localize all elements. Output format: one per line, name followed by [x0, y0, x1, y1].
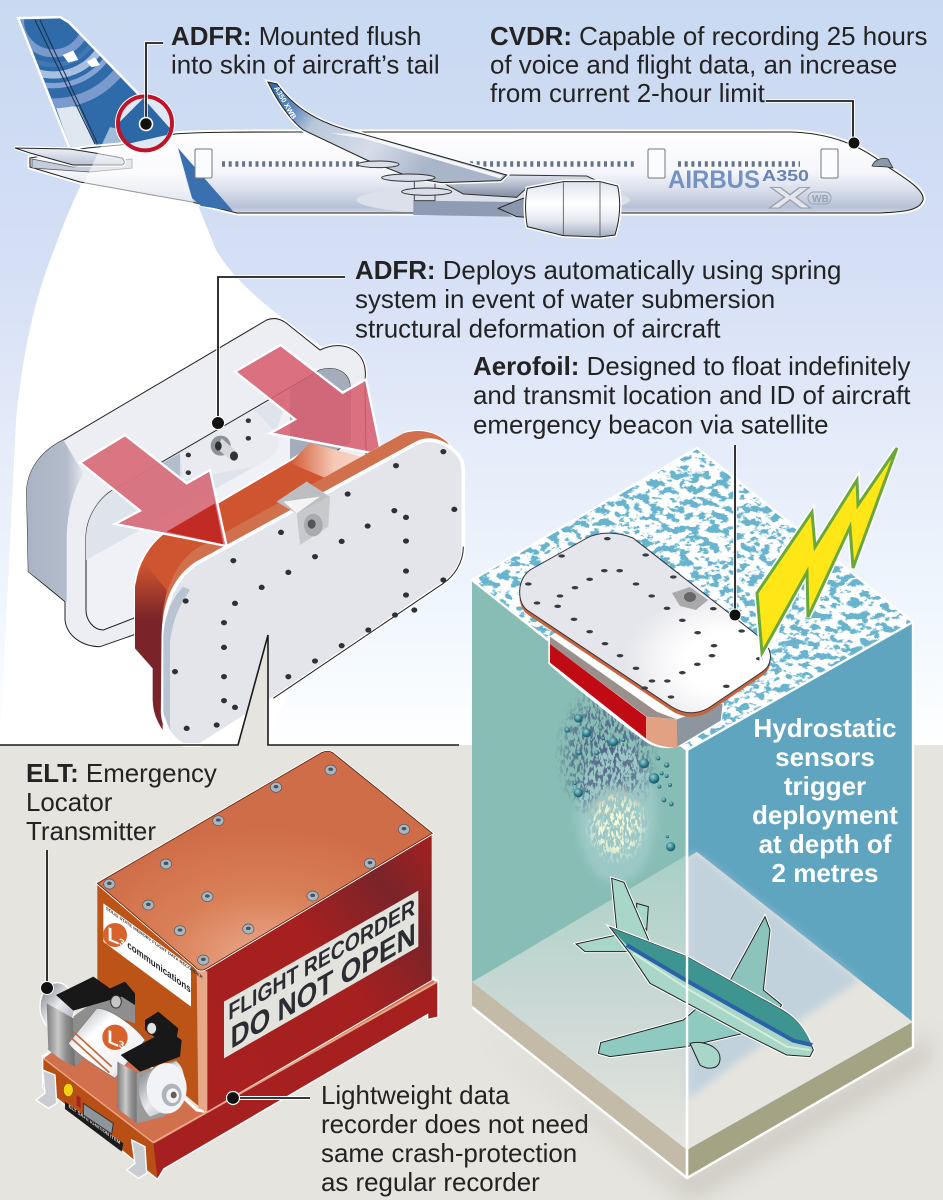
body copper corner	[646, 717, 678, 748]
front end cap	[147, 1063, 187, 1114]
base connector	[83, 1103, 113, 1134]
zoom cone from tail	[0, 127, 380, 745]
release pin	[211, 436, 238, 461]
airline logo: WB	[812, 194, 829, 205]
aerofoil edge	[520, 537, 770, 717]
far wing	[730, 917, 782, 1010]
recorder left face	[97, 883, 205, 1112]
hydrostatic text: trigger	[784, 771, 866, 801]
bubbles	[565, 714, 675, 851]
corner highlight	[197, 968, 207, 1112]
plate latch	[672, 587, 708, 610]
recorder leader	[226, 1092, 310, 1104]
left water face	[472, 580, 687, 1178]
front door	[821, 149, 838, 178]
body dark side	[135, 563, 167, 730]
base indicator lamp	[63, 1083, 73, 1097]
hydrostatic text: deployment	[752, 800, 898, 830]
airline logo: X	[769, 182, 811, 215]
ground divider with pointer	[0, 635, 459, 746]
data label	[103, 903, 203, 1007]
aerofoil leader	[729, 445, 741, 621]
recorder text: as regular recorder	[321, 1169, 540, 1197]
recorder text: same crash-protection	[321, 1140, 577, 1168]
hydrostatic text: sensors	[775, 742, 875, 772]
warning sign line one: FLIGHT RECORDER	[228, 894, 415, 1026]
front block black cap	[121, 1035, 182, 1072]
mounting foot right	[127, 1140, 147, 1178]
engine nacelle	[526, 182, 620, 237]
mount bracket panel	[180, 410, 279, 480]
engine	[690, 1042, 720, 1068]
housing opening	[86, 369, 350, 630]
engine spinner	[498, 197, 527, 217]
sunken aircraft	[576, 878, 813, 1068]
ELT cylinder	[68, 1008, 145, 1078]
background sky	[0, 0, 943, 746]
ELT assembly	[36, 977, 187, 1178]
near wing	[598, 1008, 743, 1057]
recorder top face	[97, 751, 432, 970]
submerged body	[548, 607, 724, 748]
forward door	[648, 149, 665, 178]
pylon	[443, 175, 597, 197]
rear bolt	[111, 995, 121, 1008]
warning sign line two: DO NOT OPEN	[231, 916, 416, 1056]
L3 logo letter: L3	[107, 924, 125, 952]
arrow over body	[167, 503, 223, 544]
base label text: ELT SAFE IGNITION ITEM	[69, 1104, 120, 1146]
flap fairings	[358, 161, 452, 195]
latch bracket	[277, 482, 330, 545]
body grey strip	[550, 637, 677, 719]
ADFR housing and plate	[27, 319, 463, 745]
ELT text: ELT: Emergency	[26, 760, 217, 788]
rear block side	[73, 990, 135, 1067]
cream plume specks	[583, 782, 650, 865]
CVDR text: of voice and flight data, an increase	[490, 52, 897, 80]
warning sign	[224, 891, 418, 1058]
CVDR leader	[766, 101, 860, 149]
recorder text: recorder does not need	[321, 1111, 589, 1139]
plate holes	[172, 449, 457, 731]
fuselage	[30, 132, 923, 213]
aft door	[195, 149, 212, 178]
Aerofoil text: emergency beacon via satellite	[473, 411, 828, 439]
sea floor top	[472, 852, 913, 1150]
screw sockets	[107, 768, 406, 961]
rear block	[47, 1003, 75, 1067]
aerofoil plate	[520, 533, 770, 713]
ocean cube	[472, 448, 930, 1198]
tail fin	[16, 16, 140, 148]
rear block black cap	[56, 977, 135, 1011]
tail fins	[612, 878, 661, 949]
aerofoil floating on water	[520, 533, 770, 748]
ADFR deploy leader	[212, 277, 345, 430]
CVDR text: CVDR: Capable of recording 25 hours	[490, 23, 928, 51]
right deploy arrow	[235, 345, 382, 455]
Aerofoil text: and transmit location and ID of aircraft	[473, 382, 910, 410]
wing root belly	[413, 201, 517, 217]
stabiliser lower	[32, 159, 132, 172]
hydrostatic text: 2 metres	[772, 858, 878, 888]
wing leading edge highlight	[330, 133, 503, 178]
winglet label: A350 XWB	[272, 85, 298, 121]
ADFR mount text: into skin of aircraft’s tail	[171, 52, 440, 80]
fuselage	[610, 927, 813, 1057]
CVDR text: from current 2-hour limit	[490, 80, 765, 108]
small black bracket	[145, 1012, 178, 1043]
flight recorder	[43, 751, 437, 1178]
plate holes	[525, 537, 763, 699]
mount holes	[186, 418, 251, 475]
housing	[27, 319, 367, 647]
body lighter strip	[162, 431, 453, 633]
ADFR deploy text: structural deformation of aircraft	[355, 315, 720, 343]
aircraft	[0, 0, 923, 237]
airline logo: AIRBUS	[668, 166, 760, 194]
fuselage blue swoosh	[178, 148, 233, 211]
hydrostatic text: at depth of	[759, 829, 892, 859]
ELT text: Transmitter	[26, 818, 156, 846]
sea floor left side	[472, 982, 687, 1178]
recorder right face	[205, 833, 432, 1112]
stabiliser	[15, 148, 124, 165]
ADFR mount text: ADFR: Mounted flush	[171, 23, 421, 51]
dark plume specks	[553, 680, 660, 827]
bubble plume	[553, 680, 675, 883]
plume glow	[577, 743, 657, 883]
mounting foot left	[36, 1070, 57, 1108]
fuselage stripe	[627, 945, 812, 1045]
L3 logo	[103, 923, 127, 947]
base label	[65, 1102, 123, 1152]
top face screws	[104, 765, 410, 965]
recorder plate	[163, 440, 463, 745]
cube vertical edge	[686, 750, 688, 1178]
small bolt	[147, 1022, 157, 1034]
left deploy arrow	[80, 435, 227, 546]
body highlight	[290, 443, 363, 480]
ADFR top leader	[140, 43, 163, 130]
label small text: SOLID STATE MEMORY FLIGHT DATA RECORDER	[106, 906, 203, 981]
background ground	[0, 745, 943, 1200]
cube shadow	[480, 1030, 930, 1198]
ELT L3 letter: L3	[107, 1026, 125, 1054]
Aerofoil text: Aerofoil: Designed to float indefinitely	[473, 353, 910, 381]
ELT text: Locator	[26, 789, 113, 817]
hydrostatic text: Hydrostatic	[753, 713, 897, 743]
recorder base	[43, 978, 437, 1178]
cabin windows	[222, 161, 800, 167]
sea floor right side	[687, 1022, 913, 1178]
ELT L3 logo	[102, 1025, 128, 1054]
communications wordmark: communications	[127, 939, 191, 996]
wing assembly	[268, 82, 630, 237]
tailplane	[576, 935, 632, 952]
cockpit window	[872, 158, 893, 168]
right water face	[687, 622, 913, 1178]
airline logo	[668, 166, 831, 215]
flap tracks	[414, 182, 435, 201]
base red marks	[77, 1095, 81, 1108]
orange recorder body	[135, 431, 453, 740]
front block side	[137, 1060, 177, 1123]
recorder text: Lightweight data	[321, 1082, 510, 1110]
body red face	[550, 644, 646, 739]
ELT leader	[40, 850, 54, 994]
fuselage upper	[610, 927, 811, 1043]
water surface	[472, 448, 913, 750]
airline logo: A350	[762, 168, 809, 185]
front cylinder	[139, 1062, 184, 1117]
wing root fairing	[357, 185, 630, 215]
cylinder label band	[71, 1032, 112, 1073]
body grey face	[677, 703, 723, 747]
lightning bolt	[757, 448, 897, 653]
ADFR deploy text: ADFR: Deploys automatically using spring	[355, 257, 841, 285]
rear end cap	[40, 983, 75, 1031]
wing and winglet	[268, 82, 507, 183]
cube edges	[472, 448, 913, 1178]
ADFR deploy text: system in event of water submersion	[355, 286, 775, 314]
front block	[117, 1062, 138, 1123]
tail callout ring	[115, 93, 175, 153]
tail cone lighter band	[65, 127, 201, 224]
